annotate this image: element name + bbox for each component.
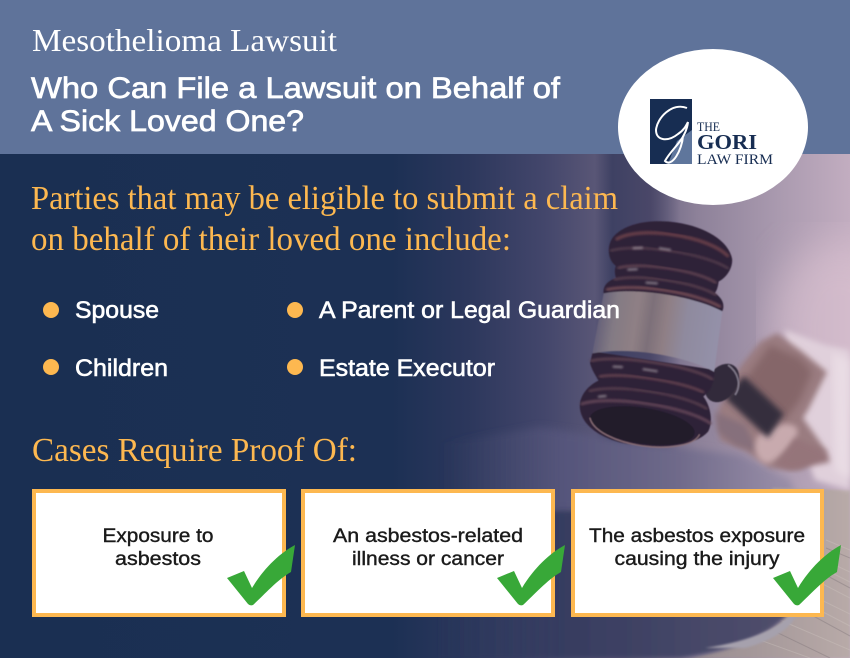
card: exposure: asbestos <box>115 548 201 570</box>
gavel head <box>575 212 740 456</box>
subheading: eligible parties <box>31 180 618 258</box>
heading: Who Can File a Lawsuit on Behalf of <box>31 72 561 105</box>
icon: check <box>227 545 295 605</box>
logo text: LAW FIRM <box>697 152 773 168</box>
hand <box>715 330 850 490</box>
lower head <box>575 351 719 456</box>
card: causation: causing the injury <box>614 548 780 570</box>
dark striking plate <box>440 505 800 658</box>
card: exposure: Exposure to <box>102 525 214 547</box>
card: causation <box>573 491 841 615</box>
logo text: THE <box>697 120 720 134</box>
subheading: proof: Cases Require Proof Of: <box>32 432 357 469</box>
gavel photo illustration <box>575 212 850 490</box>
bullet: Estate Executor: Estate Executor <box>319 355 495 382</box>
bullet: Children: Children <box>75 355 168 382</box>
card: illness: illness or cancer <box>352 548 505 570</box>
icon: check <box>773 545 841 605</box>
handle <box>725 376 784 438</box>
logo badge <box>618 49 808 205</box>
background photo panel <box>0 154 850 658</box>
card: causation: The asbestos exposure <box>589 525 805 547</box>
wooden sound block <box>690 488 850 658</box>
subheading: eligible parties: on behalf of their loved one include: <box>31 221 511 258</box>
logo text: GORI <box>697 130 757 154</box>
icon: check <box>497 545 565 605</box>
icon: monogram <box>650 99 692 164</box>
subheading: eligible parties: Parties that may be eligible to submit a claim <box>31 180 618 217</box>
card: illness: An asbestos-related <box>333 525 523 547</box>
bullet: Parent or Legal Guardian: A Parent or Legal Guardian <box>319 297 620 324</box>
heading <box>31 72 561 138</box>
bullet: Spouse: Spouse <box>75 297 159 324</box>
upper head <box>602 213 737 312</box>
logo text <box>697 120 773 168</box>
card: exposure <box>34 491 295 615</box>
table surface <box>430 427 800 510</box>
metal band <box>593 285 725 372</box>
header band <box>0 0 850 154</box>
heading: A Sick Loved One? <box>31 105 304 138</box>
title: eyebrow: Mesothelioma Lawsuit <box>32 22 337 58</box>
card: illness <box>303 491 565 615</box>
bullet list <box>43 297 620 382</box>
